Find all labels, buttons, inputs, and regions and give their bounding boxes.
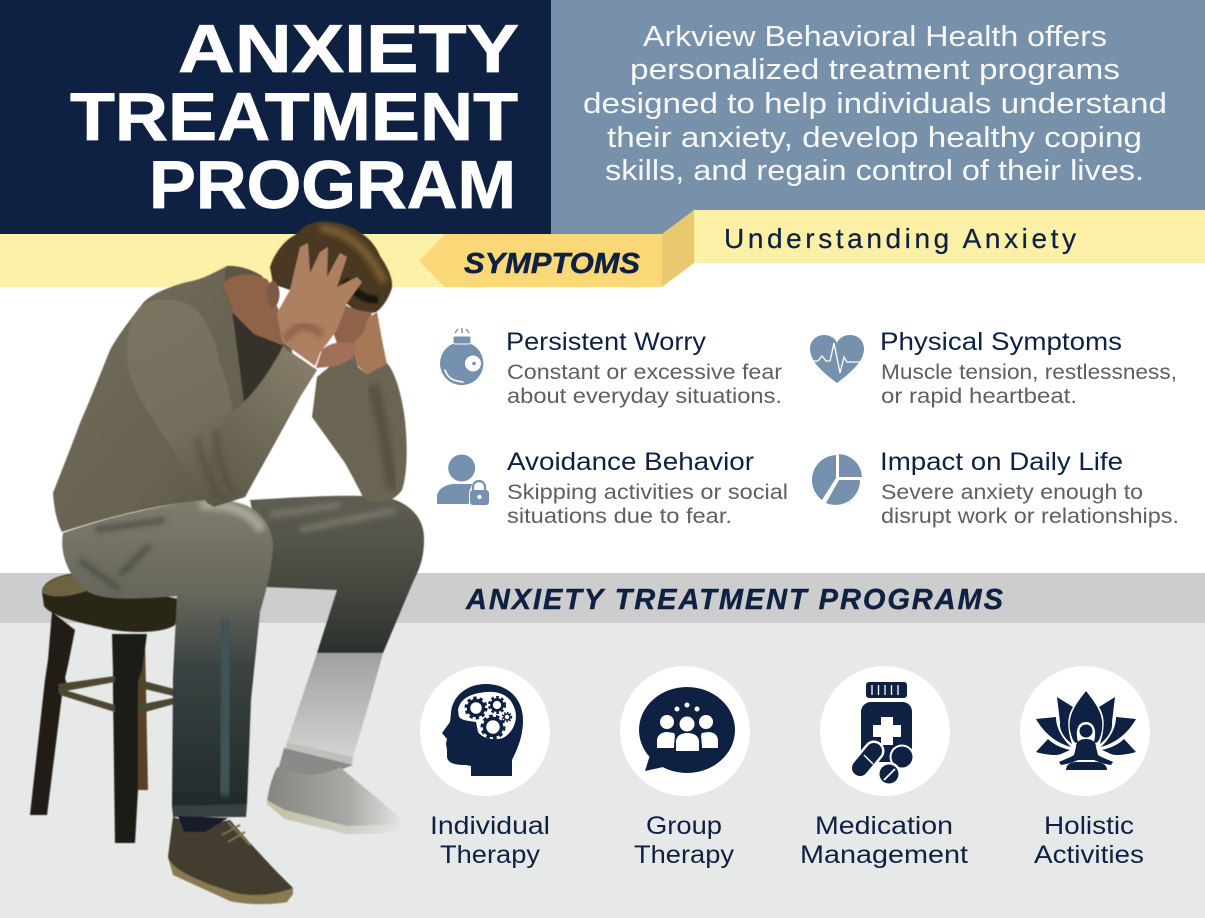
highlights on far thigh — [270, 505, 395, 530]
symptom: physical symptoms: Muscle tension, restlessness, — [881, 360, 1177, 384]
symptom: physical symptoms: or rapid heartbeat. — [881, 384, 1077, 408]
near arm — [127, 300, 317, 507]
chin and wrist — [316, 342, 357, 368]
icon: speech bubble with people — [639, 687, 735, 773]
face — [333, 305, 372, 346]
panel: treatment programs background — [0, 573, 1205, 918]
symptom: impact on daily life: Severe anxiety enough to — [881, 480, 1143, 504]
program: individual therapy: Therapy — [440, 841, 541, 869]
program: medication management — [800, 666, 968, 869]
symptom: persistent worry: Persistent Worry — [506, 328, 707, 356]
far sock — [278, 748, 353, 778]
program: holistic activities: Activities — [1034, 841, 1144, 869]
panel: intro — [551, 0, 1205, 234]
symptom: avoidance behavior: Avoidance Behavior — [507, 448, 754, 476]
symptom: physical symptoms — [810, 328, 1177, 408]
symptom: persistent worry: Constant or excessive fear — [507, 360, 782, 384]
understanding anxiety heading: Understanding Anxiety — [724, 223, 1076, 254]
intro paragraph: their anxiety, develop healthy coping — [607, 122, 1142, 154]
symptoms heading: SYMPTOMS — [464, 248, 641, 280]
program: group therapy: Therapy — [634, 841, 735, 869]
programs heading: ANXIETY TREATMENT PROGRAMS — [465, 584, 1004, 616]
illustration: man sitting on stool holding his head — [30, 222, 424, 904]
program: holistic activities: Holistic — [1044, 812, 1134, 840]
near hand — [277, 243, 362, 366]
symptom: avoidance behavior: Skipping activities or social — [507, 480, 788, 504]
far leg — [250, 496, 424, 834]
symptom: impact on daily life: disrupt work or relationships. — [881, 504, 1179, 528]
icon: pie chart — [812, 454, 862, 505]
far shoe, faded — [267, 767, 405, 834]
title: PROGRAM — [149, 147, 516, 223]
program: holistic activities — [1020, 666, 1150, 869]
icon: bomb — [440, 328, 483, 385]
title: TREATMENT — [70, 79, 518, 155]
ear — [266, 281, 280, 307]
symptom: avoidance behavior — [437, 448, 788, 528]
symptom: persistent worry: about everyday situations. — [507, 384, 782, 408]
symptom: avoidance behavior: situations due to fear. — [507, 504, 732, 528]
stool — [30, 574, 182, 843]
symptom: physical symptoms: Physical Symptoms — [880, 328, 1122, 356]
title: ANXIETY — [178, 11, 519, 87]
intro paragraph: designed to help individuals understand — [583, 88, 1167, 120]
panel: title block — [0, 0, 551, 234]
icon: person with lock — [437, 454, 489, 505]
symptom: impact on daily life — [812, 448, 1179, 528]
program: group therapy: Group — [646, 812, 722, 840]
near leg — [62, 499, 273, 817]
intro paragraph: Arkview Behavioral Health offers — [643, 21, 1107, 53]
far arm — [312, 347, 407, 502]
intro paragraph: personalized treatment programs — [630, 54, 1120, 86]
intro paragraph — [583, 21, 1167, 187]
symptom: impact on daily life: Impact on Daily Life — [880, 448, 1123, 476]
near shoe — [168, 816, 293, 904]
program: group therapy — [620, 666, 750, 869]
banner: understanding anxiety and symptoms — [0, 210, 1205, 287]
icon: lotus with meditating figure — [1036, 691, 1136, 770]
symptom: persistent worry — [440, 328, 782, 408]
program: medication management: Management — [800, 841, 968, 869]
neck — [223, 274, 283, 345]
icon: head with gears — [442, 684, 523, 776]
icon: pill bottle — [860, 682, 914, 786]
program: medication management: Medication — [815, 812, 953, 840]
torso and sweater — [53, 266, 300, 532]
far hand — [352, 312, 387, 374]
intro paragraph: skills, and regain control of their lives. — [605, 155, 1144, 187]
program: individual therapy — [420, 666, 550, 869]
head and hands — [266, 222, 392, 374]
program: individual therapy: Individual — [430, 812, 550, 840]
title — [70, 11, 519, 223]
icon: heart with pulse — [810, 335, 864, 383]
